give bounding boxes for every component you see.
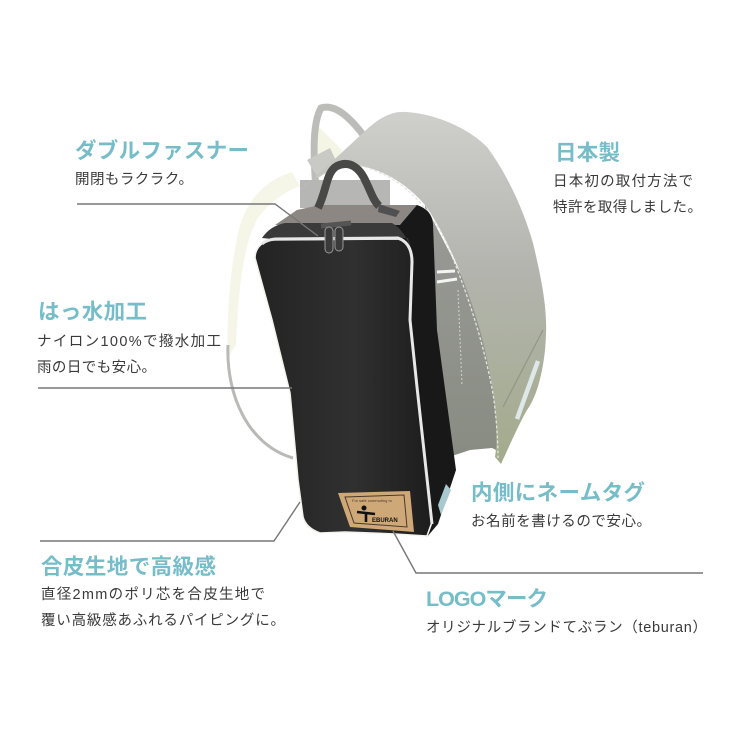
inner panel (425, 205, 500, 456)
backpack illustration (228, 107, 546, 464)
callout: logo mark (393, 531, 707, 636)
callout: water repellent: はっ水加工 (38, 300, 147, 324)
callout: made in Japan: 日本初の取付方法で (553, 173, 693, 190)
callout: water repellent: 雨の日でも安心。 (37, 359, 156, 376)
callout: synthetic leather: 直径2mmのポリ芯を合皮生地で (41, 586, 265, 603)
logo tag: For safe commuting to (352, 498, 393, 503)
bag front panel (255, 239, 432, 536)
callout: logo mark: オリジナルブランドてぶラン（teburan） (426, 618, 707, 636)
callout: made in Japan: 日本製 (555, 141, 620, 165)
flap (301, 112, 546, 464)
callout: water repellent (37, 300, 292, 388)
callout: double zipper (75, 138, 318, 236)
callout: synthetic leather: 合皮生地で高級感 (41, 554, 216, 579)
callout: name tag: お名前を書けるので安心。 (471, 513, 651, 530)
callout: name tag (471, 480, 651, 530)
bag side and top (262, 205, 456, 537)
logo tag: EBURAN (372, 518, 398, 524)
callout: water repellent: ナイロン100%で撥水加工 (37, 333, 221, 350)
callout: name tag: 内側にネームタグ (471, 480, 645, 505)
callout: double zipper: 開閉もラクラク。 (75, 171, 193, 188)
callout: logo mark: LOGOマーク (426, 587, 548, 611)
callout: synthetic leather (40, 502, 300, 629)
callout: double zipper: ダブルファスナー (75, 138, 249, 163)
callout: synthetic leather: 覆い高級感あふれるパイピングに。 (41, 612, 285, 629)
callout: made in Japan (553, 141, 702, 216)
reflective strip (517, 361, 538, 419)
logo tag (338, 491, 414, 532)
shoe bag (255, 164, 456, 537)
callout: made in Japan: 特許を取得しました。 (553, 199, 702, 216)
carry handle (318, 164, 379, 208)
zipper pulls (321, 223, 351, 253)
